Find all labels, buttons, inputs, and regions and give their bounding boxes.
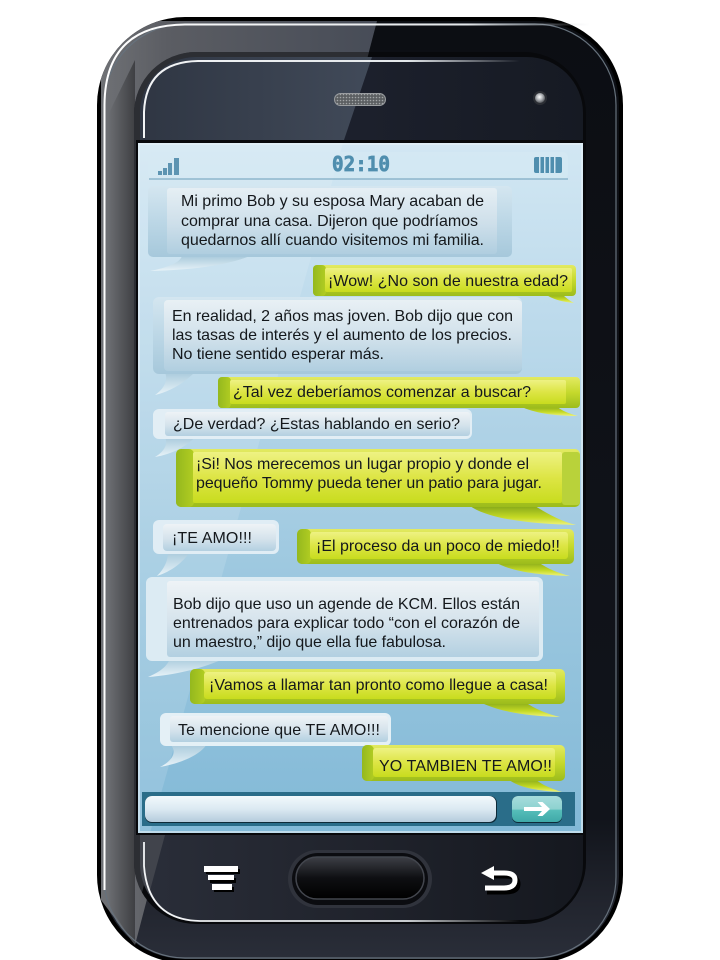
- icon: back arrow: [481, 866, 518, 892]
- message: sent 3: pequeño Tommy pueda tener un patio para jugar.: [196, 475, 542, 492]
- message: received 2: En realidad, 2 años mas joven. Bob dijo que con: [172, 308, 513, 325]
- phone body: [97, 17, 623, 960]
- lower bezel highlight: [144, 842, 520, 921]
- message: sent 3: [176, 449, 580, 525]
- message: received 5: entrenados para explicar todo “con el corazón de: [173, 615, 520, 632]
- message: received 3: [153, 409, 472, 457]
- message: sent 6: [362, 745, 565, 792]
- message: received 4: [153, 520, 279, 576]
- message: sent 5: [190, 669, 565, 717]
- message: received 3: ¿De verdad? ¿Estas hablando en serio?: [173, 416, 460, 433]
- message: received 1: comprar una casa. Dijeron que podríamos: [181, 213, 478, 230]
- message: received 6: [160, 713, 391, 767]
- message: received 1: quedarnos allí cuando visitemos mi familia.: [181, 232, 484, 249]
- message: received 1: Mi primo Bob y su esposa Mary acaban de: [181, 193, 484, 210]
- camera: [533, 91, 547, 105]
- icon: menu: [204, 866, 240, 892]
- send button: [512, 796, 562, 823]
- home button: [288, 850, 432, 908]
- input bar: [142, 792, 575, 826]
- upper bezel with speaker and camera: [140, 57, 583, 920]
- text field: [145, 796, 497, 823]
- icon: battery: [534, 157, 562, 173]
- message: received 5: Bob dijo que uso un agende de KCM. Ellos están: [173, 596, 520, 613]
- message: received 1: [148, 186, 512, 271]
- message: received 5: [146, 577, 543, 677]
- speaker: [334, 94, 386, 106]
- message: received 6: Te mencione que TE AMO!!!: [178, 722, 380, 739]
- message: sent 4: [297, 529, 574, 576]
- message: received 2: No tiene sentido esperar más.: [172, 346, 384, 363]
- message: sent 2: [218, 377, 580, 416]
- message: sent 1: ¡Wow! ¿No son de nuestra edad?: [328, 273, 568, 290]
- icon: signal bars: [158, 158, 179, 175]
- message: received 2: las tasas de interés y el aumento de los precios.: [172, 327, 512, 344]
- clock: 02:10: [332, 152, 390, 176]
- message: received 2: [153, 297, 522, 395]
- screen: [136, 140, 585, 835]
- message: sent 5: ¡Vamos a llamar tan pronto como llegue a casa!: [209, 677, 548, 694]
- status bar: [148, 152, 568, 179]
- message: sent 3: ¡Si! Nos merecemos un lugar propio y donde el: [196, 456, 529, 473]
- message: sent 6: YO TAMBIEN TE AMO!!: [379, 758, 552, 775]
- message: sent 4: ¡El proceso da un poco de miedo!!: [316, 538, 560, 555]
- message: received 4: ¡TE AMO!!!: [172, 530, 252, 547]
- message: received 5: un maestro,” dijo que ella fue fabulosa.: [173, 634, 446, 651]
- message: sent 1: [313, 265, 576, 303]
- message: sent 2: ¿Tal vez deberíamos comenzar a buscar?: [233, 384, 531, 401]
